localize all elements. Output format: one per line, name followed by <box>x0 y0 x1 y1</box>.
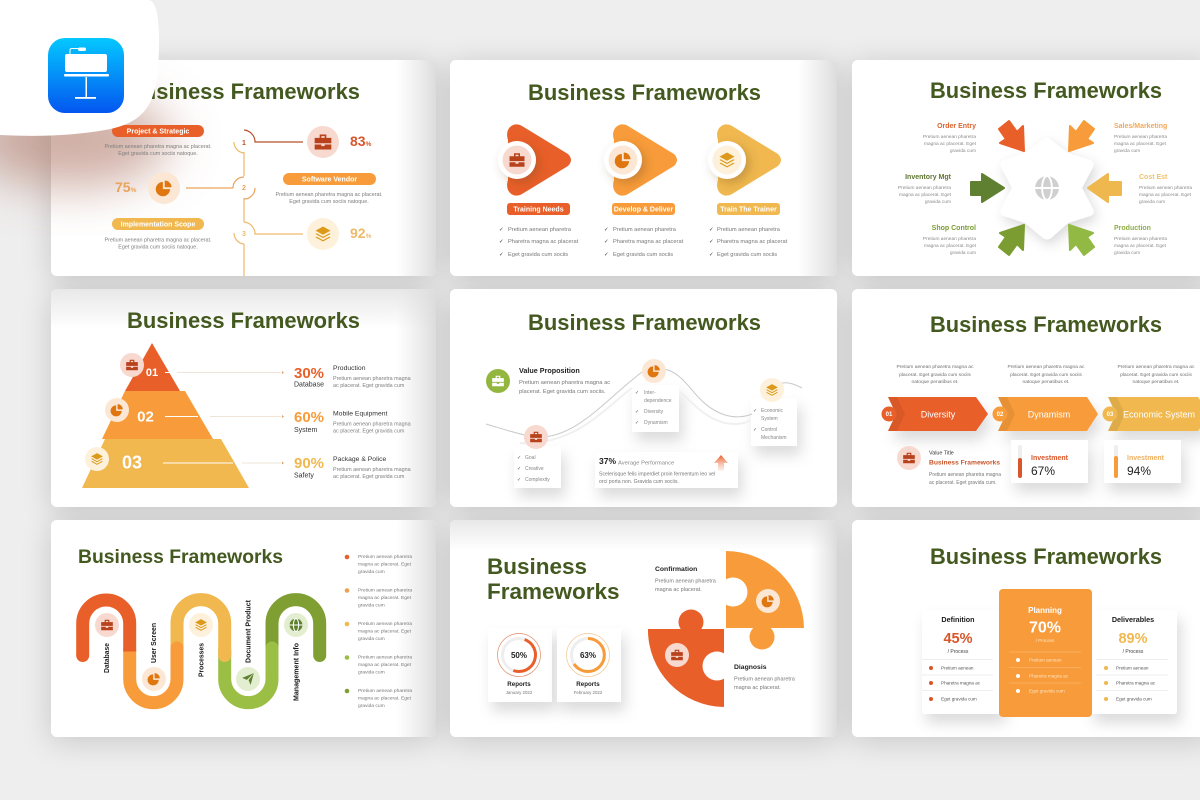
column: Planning: Pretium aenean <box>1029 658 1062 662</box>
bullet list <box>345 554 412 709</box>
stat 30%: 30% <box>294 365 324 382</box>
column: Definition: Pretium aenean <box>941 666 974 670</box>
card lists: Complexity <box>525 477 550 483</box>
panel: slide 1 timeline <box>0 60 436 276</box>
step numbers: 2 <box>242 185 246 192</box>
descriptions: magna ac placerat. Eget <box>1114 243 1167 249</box>
value title <box>897 446 1001 486</box>
value proposition: placerat. Eget gravida cum sociis. <box>519 389 606 395</box>
column: Definition <box>922 610 1002 714</box>
top descriptions: natoque penatibus et. <box>911 379 959 385</box>
top descriptions: Pretium aenean pharetra magna ac <box>1118 364 1195 370</box>
column: Training Needs: Pharetra magna ac placerat <box>508 239 579 245</box>
card lists: dependence <box>644 398 672 404</box>
panel: slide 4 pyramid <box>51 289 436 507</box>
step numbers: 1 <box>242 140 246 147</box>
card lists: Economic <box>761 408 783 414</box>
labels: Order Entry <box>937 123 976 130</box>
step: Implementation Scope: Implementation Scope <box>121 222 195 228</box>
column: Training Needs: ✓ <box>499 252 504 258</box>
37% average performance: 37% <box>599 456 616 466</box>
stat 60%: Pretium aenean pharetra magna <box>333 422 411 428</box>
chevron: Diversity <box>882 397 988 431</box>
card lists: ✓ <box>517 455 521 461</box>
heading: Frameworks <box>487 579 620 604</box>
stat 90% <box>294 455 411 480</box>
report card 63%: Reports <box>576 681 600 688</box>
text: Diagnosis: Pretium aenean pharetra <box>734 676 796 682</box>
value title: Value Title <box>929 450 954 456</box>
labels: Cost Est <box>1139 174 1168 181</box>
column: Train The Trainer: ✓ <box>709 239 714 245</box>
tier numbers: 01 <box>146 367 158 379</box>
stat 60%: Mobile Equipment <box>333 410 388 418</box>
card lists: ✓ <box>635 390 639 396</box>
step: 92% stat: 92% <box>350 225 372 241</box>
card lists: ✓ <box>635 409 639 415</box>
bullet list: gravida cum <box>358 670 385 676</box>
card lists: ✓ <box>635 420 639 426</box>
step: Software Vendor: Software Vendor <box>302 176 357 184</box>
card: Investment 94% <box>1104 440 1181 483</box>
stat 60%: 60% <box>294 409 324 426</box>
column: Planning: Planning <box>1028 606 1062 615</box>
value proposition: Pretium aenean pharetra magna ac <box>519 380 610 386</box>
stat 30%: Database <box>294 382 324 388</box>
step numbers <box>242 140 246 238</box>
step numbers: 3 <box>242 231 246 238</box>
column: Deliverables: 89% <box>1118 631 1148 647</box>
bullet list: gravida cum <box>358 703 385 709</box>
rotated labels: Processes <box>198 643 206 677</box>
column: Definition: Eget gravida cum <box>941 696 977 702</box>
panel: slide 5 wave <box>450 289 837 507</box>
panel: slide 7 serpentine <box>51 520 436 737</box>
column: Develop & Deliver: ✓ <box>604 252 609 258</box>
37% average performance: Average Performance <box>618 460 674 466</box>
heading: Business <box>487 554 587 579</box>
panel: slide 6 chevrons <box>852 289 1200 507</box>
arrows <box>971 121 1121 255</box>
report card 50%: 50% <box>511 651 527 660</box>
column: Train The Trainer: Eget gravida cum sociis <box>717 252 777 258</box>
card: Investment 67%: Investment <box>1031 455 1069 462</box>
stat 30%: ac placerat. Eget gravida cum <box>333 383 405 389</box>
card lists: ✓ <box>753 408 757 414</box>
stat 90%: 90% <box>294 455 324 472</box>
centre star <box>1000 137 1094 240</box>
step: Implementation Scope: Eget gravida cum sociis natoque. <box>118 244 198 250</box>
rotated labels: Document Product <box>246 599 252 663</box>
card: Investment 94%: 94% <box>1127 464 1151 478</box>
step: Project & Strategic: Project & Strategic <box>127 128 189 136</box>
column: Develop & Deliver: ✓ <box>604 227 609 233</box>
chevron: Dynamism <box>992 397 1098 431</box>
card lists: Dynamism <box>644 420 668 426</box>
bullet list: magna ac placerat. Eget <box>358 595 412 601</box>
descriptions: Pretium aenean pharetra <box>923 236 976 242</box>
card lists: ✓ <box>517 477 521 483</box>
descriptions: gravida cum <box>1114 148 1140 154</box>
descriptions: gravida cum <box>925 199 951 205</box>
card lists: Mechanism <box>761 435 787 441</box>
column: Training Needs: ✓ <box>499 227 504 233</box>
puzzle piece: red <box>648 610 732 707</box>
report card 50% <box>488 628 552 702</box>
bullet list: magna ac placerat. Eget <box>358 696 412 702</box>
tier numbers: 03 <box>122 452 142 472</box>
bullet list: magna ac placerat. Eget <box>358 628 412 634</box>
bullet list: Pretium aenean pharetra <box>358 654 412 660</box>
pyramid tiers <box>82 343 249 488</box>
heading: Business Frameworks <box>930 78 1162 103</box>
top descriptions: placerat. Eget gravida cum sociis <box>1120 372 1192 378</box>
stat 60%: ac placerat. Eget gravida cum <box>333 428 405 434</box>
heading <box>487 554 620 604</box>
bullet list: gravida cum <box>358 569 385 575</box>
column: Definition: Definition <box>941 615 975 624</box>
bullet list: Pretium aenean pharetra <box>358 621 412 627</box>
card: Investment 67% <box>1011 440 1088 483</box>
labels: Production <box>1114 225 1151 232</box>
tier numbers: 02 <box>137 408 154 426</box>
descriptions: Pretium aenean pharetra <box>1114 236 1167 242</box>
descriptions: gravida cum <box>950 148 976 154</box>
column: Planning: / Process <box>1036 638 1055 643</box>
bullet list: Pretium aenean pharetra <box>358 588 412 594</box>
report card 50%: January 2022 <box>506 690 533 695</box>
card lists: Diversity <box>644 409 664 415</box>
labels: Inventory Mgt <box>905 174 952 181</box>
chevron: Dynamism: Dynamism <box>1028 410 1070 420</box>
column: Definition: Pharetra magna ac <box>941 680 981 686</box>
step: 75% stat: 75% <box>115 179 137 195</box>
descriptions: Pretium aenean pharetra <box>898 185 951 191</box>
descriptions: magna ac placerat. Eget <box>924 141 977 147</box>
descriptions: gravida cum <box>950 250 976 256</box>
heading: Business Frameworks <box>528 310 761 335</box>
card lists: Goal <box>525 455 536 461</box>
column: Deliverables: Pretium aenean <box>1116 666 1149 670</box>
panel: slide 2 play triangles <box>450 60 837 276</box>
labels: Sales/Marketing <box>1114 123 1167 130</box>
column: Develop & Deliver: Pretium aenean pharetra <box>613 227 677 233</box>
stat 60%: System <box>294 427 318 434</box>
step: Software Vendor <box>276 173 382 205</box>
step: 92% stat <box>307 218 372 250</box>
text: Confirmation <box>655 566 717 593</box>
descriptions: Pretium aenean pharetra <box>1114 134 1167 140</box>
column: Deliverables: Pharetra magna ac <box>1116 680 1156 686</box>
top descriptions: Pretium aenean pharetra magna ac <box>1008 364 1085 370</box>
text: Confirmation: Pretium aenean pharetra <box>655 578 717 584</box>
bullet list: Pretium aenean pharetra <box>358 554 412 560</box>
stat 90%: Package & Police <box>333 456 386 463</box>
step: 83% stat: 83% <box>350 133 372 149</box>
text: Confirmation: Confirmation <box>655 566 697 573</box>
top descriptions: placerat. Eget gravida cum sociis <box>1010 372 1082 378</box>
icon: Keynote app <box>48 38 124 113</box>
step: 83% stat <box>307 126 372 158</box>
heading: Business Frameworks <box>127 79 360 104</box>
text: Diagnosis: magna ac placerat. <box>734 685 781 691</box>
top descriptions: natoque penatibus et. <box>1022 379 1070 385</box>
cards <box>514 385 797 488</box>
chevron: Dynamism: 02 <box>997 412 1004 418</box>
heading: Business Frameworks <box>528 80 761 105</box>
chevron: Economic System <box>1102 397 1200 431</box>
card lists: Creative <box>525 466 544 472</box>
card lists: Control <box>761 427 777 433</box>
37% average performance: orci porta non. Gravida cum sociis. <box>599 479 679 485</box>
column: Develop & Deliver: Eget gravida cum sociis <box>613 252 673 258</box>
card lists: Inter- <box>644 390 656 396</box>
card: Investment 94%: Investment <box>1127 455 1165 462</box>
value title: Business Frameworks <box>929 460 1000 466</box>
37% average performance: Scelerisque felis imperdiet proin fermentum leo vel <box>599 472 715 478</box>
bullet list: magna ac placerat. Eget <box>358 662 412 668</box>
tier icons <box>85 353 144 471</box>
text: Diagnosis: Diagnosis <box>734 664 767 671</box>
stat 30%: Production <box>333 365 366 372</box>
top descriptions <box>897 364 1195 385</box>
step: 75% stat <box>115 172 180 204</box>
rotated labels: Management Info <box>294 643 300 701</box>
descriptions: magna ac placerat. Eget <box>1139 192 1192 198</box>
column: Train The Trainer: Pretium aenean pharetra <box>717 227 781 233</box>
rotated labels: Database <box>104 643 111 673</box>
step: Software Vendor: Eget gravida cum sociis natoque. <box>289 199 369 205</box>
puzzle piece: orange <box>718 551 804 650</box>
rotated labels: User Screen <box>151 623 158 663</box>
bullet list: gravida cum <box>358 636 385 642</box>
heading: Business Frameworks <box>78 547 283 568</box>
heading: Business Frameworks <box>127 308 360 333</box>
panel: slide 3 arrows and star <box>852 60 1200 276</box>
report card 63%: 63% <box>580 651 596 660</box>
column: Develop & Deliver: ✓ <box>604 239 609 245</box>
leader lines <box>163 371 284 464</box>
bullet list: Pretium aenean pharetra <box>358 688 412 694</box>
text: Diagnosis <box>734 664 796 691</box>
heading: Business Frameworks <box>930 544 1162 569</box>
value title: ac placerat. Eget gravida cum. <box>929 480 997 486</box>
text: Confirmation: magna ac placerat. <box>655 587 702 593</box>
column: Develop & Deliver: Pharetra magna ac placerat <box>613 239 684 245</box>
column: Planning: Pharetra magna ac <box>1029 674 1069 678</box>
stat 90%: Safety <box>294 472 314 480</box>
column: Training Needs: ✓ <box>499 239 504 245</box>
stat 30% <box>294 365 411 389</box>
value title: Pretium aenean pharetra magna <box>929 472 1001 478</box>
column: Develop & Deliver <box>604 124 684 258</box>
step: Implementation Scope: Pretium aenean pharetra magna ac placerat. <box>105 238 211 244</box>
37% average performance <box>599 455 728 485</box>
column: Train The Trainer: Train The Trainer <box>720 206 777 214</box>
value proposition <box>486 366 610 395</box>
column: Training Needs: Eget gravida cum sociis <box>508 252 568 258</box>
bullet list: magna ac placerat. Eget <box>358 562 412 568</box>
stat 90%: ac placerat. Eget gravida cum <box>333 474 405 480</box>
descriptions: magna ac placerat. Eget <box>1114 141 1167 147</box>
descriptions: gravida cum <box>1114 250 1140 256</box>
labels: Shop Control <box>932 225 976 232</box>
chevron: Economic System: Economic System <box>1123 410 1195 420</box>
step: Project & Strategic: Pretium aenean pharetra magna ac placerat. <box>105 144 211 150</box>
value proposition: Value Proposition <box>519 366 580 375</box>
descriptions <box>898 134 1192 256</box>
column: Training Needs: Training Needs <box>513 206 564 214</box>
column: Develop & Deliver: Develop & Deliver <box>614 206 674 214</box>
descriptions: magna ac placerat. Eget <box>899 192 952 198</box>
column: Deliverables: / Process <box>1123 649 1144 655</box>
serpentine path <box>76 600 320 703</box>
top descriptions: natoque penatibus et. <box>1132 379 1180 385</box>
step: Implementation Scope <box>105 218 211 250</box>
card lists: System <box>761 416 778 422</box>
tier numbers <box>122 367 158 472</box>
wave icons <box>524 359 784 449</box>
column: Deliverables: Eget gravida cum <box>1116 696 1152 702</box>
descriptions: gravida cum <box>1139 199 1165 205</box>
column: Deliverables: Deliverables <box>1112 615 1154 624</box>
panel: slide 9 pricing columns <box>852 520 1200 737</box>
column: Train The Trainer: ✓ <box>709 252 714 258</box>
card lists: ✓ <box>517 466 521 472</box>
heading: Business Frameworks <box>930 312 1162 337</box>
step: Project & Strategic: Eget gravida cum sociis natoque. <box>118 151 198 157</box>
card lists <box>517 390 787 483</box>
chevron: Diversity: Diversity <box>921 410 956 420</box>
column: Definition: 45% <box>943 631 973 647</box>
column: Training Needs: Pretium aenean pharetra <box>508 227 572 233</box>
card: Investment 67%: 67% <box>1031 464 1055 478</box>
descriptions: Pretium aenean pharetra <box>923 134 976 140</box>
step: Software Vendor: Pretium aenean pharetra magna ac placerat. <box>276 192 382 198</box>
top descriptions: Pretium aenean pharetra magna ac <box>897 364 974 370</box>
chevron: Economic System: 03 <box>1107 412 1114 418</box>
report card 63% <box>557 628 621 702</box>
panel: slide 8 puzzle <box>450 520 837 737</box>
bullet list: gravida cum <box>358 602 385 608</box>
column: Train The Trainer: ✓ <box>709 227 714 233</box>
card lists: ✓ <box>753 427 757 433</box>
wave line <box>486 368 802 443</box>
stat 60% <box>294 409 411 434</box>
column: Deliverables <box>1090 610 1177 714</box>
step: Project & Strategic <box>105 125 211 157</box>
badge: white corner shape <box>0 0 159 136</box>
labels <box>905 123 1168 232</box>
column: Training Needs <box>498 124 579 258</box>
descriptions: magna ac placerat. Eget <box>924 243 977 249</box>
column: Train The Trainer: Pharetra magna ac placerat <box>717 239 788 245</box>
column: Planning: 70% <box>1029 620 1061 636</box>
column: Train The Trainer <box>708 124 788 258</box>
stat 90%: Pretium aenean pharetra magna <box>333 467 411 473</box>
top descriptions: placerat. Eget gravida cum sociis <box>899 372 971 378</box>
column: Planning <box>999 589 1092 717</box>
report card 50%: Reports <box>507 681 531 688</box>
rotated labels <box>104 599 300 701</box>
descriptions: Pretium aenean pharetra <box>1139 185 1192 191</box>
report card 63%: February 2022 <box>574 690 603 695</box>
timeline spine <box>186 130 303 276</box>
serpentine icons <box>95 613 308 691</box>
column: Planning: Eget gravida cum <box>1029 688 1065 694</box>
column: Definition: / Process <box>948 649 969 655</box>
stat 30%: Pretium aenean pharetra magna <box>333 376 411 382</box>
chevron: Diversity: 01 <box>886 412 893 418</box>
